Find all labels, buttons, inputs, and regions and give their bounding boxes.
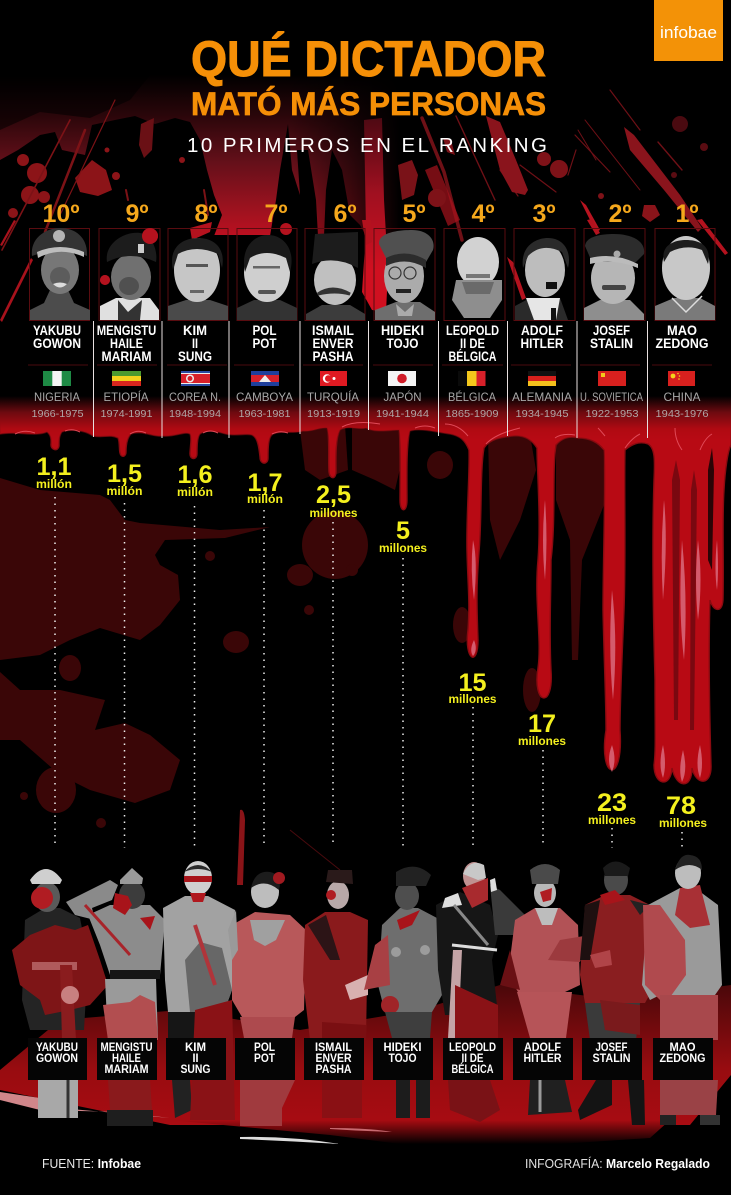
column separators: [94, 321, 648, 438]
ranking positions: 3º: [532, 200, 556, 228]
flags: [43, 371, 695, 386]
bottom name labels: [28, 1038, 713, 1080]
name list row: II DE: [460, 336, 485, 351]
bottom name labels: HIDEKI: [384, 1042, 422, 1054]
country and period labels: 1963-1981: [238, 408, 291, 420]
portrait: Hideki Tojo: [375, 230, 435, 320]
death toll values: millón: [36, 479, 72, 491]
death toll values: millones: [310, 508, 358, 520]
bottom name labels: ZEDONG: [660, 1053, 706, 1065]
country and period labels: 1974-1991: [100, 408, 153, 420]
country and period labels: 1941-1944: [376, 408, 429, 420]
name list row: KIM: [183, 323, 207, 338]
blood floor behind figures: [0, 810, 731, 1144]
portrait: Pol Pot: [237, 235, 297, 320]
portrait: Adolf Hitler: [515, 238, 569, 320]
portrait: Ismail Enver Pasha: [306, 232, 365, 320]
name list row: MENGISTU: [97, 323, 156, 338]
figure: Ismail Enver Pasha: [303, 870, 368, 1118]
flag: Japan: [388, 371, 416, 386]
portrait: Leopold II: [452, 237, 502, 318]
country and period labels: U. SOVIETICA: [580, 390, 643, 404]
bottom name labels: HITLER: [524, 1053, 562, 1065]
flag: Cambodia: [251, 371, 279, 386]
title: QUÉ DICTADOR: [191, 31, 546, 87]
death toll values: 5: [396, 517, 410, 545]
death toll values: 15: [458, 669, 487, 697]
blood band with drips: [0, 385, 731, 784]
bottom name labels: KIM: [185, 1042, 206, 1054]
name list row: ADOLF: [521, 323, 563, 338]
portrait row frames: [30, 228, 715, 320]
country and period labels: [32, 389, 709, 420]
portrait: Mengistu Haile Mariam: [100, 228, 159, 320]
name list row: HITLER: [520, 336, 564, 351]
bottom name labels: ADOLF: [524, 1042, 561, 1054]
bottom name labels: LEOPOLD: [449, 1042, 496, 1054]
name list row: ISMAIL: [312, 323, 354, 338]
death toll values: millón: [106, 486, 142, 498]
country and period labels: COREA N.: [169, 390, 221, 404]
country and period labels: 1865-1909: [446, 408, 499, 420]
death toll values: [36, 453, 707, 830]
ranking positions: 8º: [194, 200, 218, 228]
name list row: STALIN: [590, 336, 633, 351]
figure: Adolf Hitler: [500, 864, 590, 1115]
death toll values: 1,5: [107, 460, 142, 488]
name list row: POT: [252, 336, 277, 351]
country and period labels: BÉLGICA: [448, 389, 496, 404]
figure: Josef Stalin: [578, 862, 655, 1125]
death toll values: millones: [588, 815, 636, 827]
bottom name labels: II DE: [462, 1053, 484, 1065]
dotted leader lines: [55, 497, 682, 848]
death toll values: millones: [518, 736, 566, 748]
name list row: POL: [252, 323, 276, 338]
country and period labels: 1943-1976: [656, 408, 709, 420]
death toll values: 2,5: [316, 481, 351, 509]
bottom name labels: ENVER: [316, 1053, 352, 1065]
title: MATÓ MÁS PERSONAS: [191, 86, 546, 122]
name list row: TOJO: [386, 336, 418, 351]
mid-page dark blood splatter: [0, 425, 606, 828]
death toll values: millones: [659, 818, 707, 830]
bottom name labels: POL: [254, 1042, 275, 1054]
name list row: ENVER: [312, 336, 354, 351]
figure: Mengistu Haile Mariam: [66, 868, 165, 1126]
country and period labels: ALEMANIA: [512, 390, 572, 404]
bottom name labels: GOWON: [36, 1053, 78, 1065]
name list row: JOSEF: [593, 323, 630, 338]
flag: Turkey: [320, 371, 347, 386]
country and period labels: ETIOPÍA: [104, 389, 148, 404]
name list row: HIDEKI: [381, 323, 424, 338]
death toll values: 23: [597, 789, 627, 817]
ranking positions: 5º: [402, 200, 426, 228]
ranking positions: 2º: [608, 200, 632, 228]
name list row: PASHA: [312, 349, 354, 364]
name list row: MAO: [667, 323, 697, 338]
bottom name labels: BÉLGICA: [452, 1063, 494, 1076]
bottom name labels: SUNG: [180, 1064, 211, 1076]
bottom name labels: MAO: [670, 1042, 696, 1054]
death toll values: millón: [177, 487, 213, 499]
logo: infobae: infobae: [660, 24, 717, 42]
death toll values: 1,7: [248, 469, 282, 497]
country and period labels: 1966-1975: [32, 408, 84, 420]
top blood splatter background: [0, 75, 728, 322]
flag: USSR: [598, 371, 626, 386]
bottom name labels: ISMAIL: [315, 1042, 352, 1054]
ranking positions: [43, 200, 699, 228]
ranking positions: 10º: [43, 200, 79, 228]
bottom name labels: YAKUBU: [36, 1042, 78, 1054]
country and period labels: TURQUÍA: [307, 389, 359, 404]
figure: Yakubu Gowon: [12, 869, 108, 1118]
death toll values: millones: [448, 694, 496, 706]
figure: Leopold II: [436, 862, 525, 1122]
figure: Mao Zedong: [642, 855, 722, 1125]
country and period labels: CHINA: [664, 390, 700, 404]
death toll values: millón: [247, 494, 283, 506]
bottom name labels: HAILE: [112, 1053, 141, 1065]
country and period labels: NIGERIA: [34, 390, 80, 404]
figure: Hideki Tojo: [364, 867, 442, 1118]
death toll values: 78: [666, 792, 696, 820]
name list row: [33, 323, 708, 364]
ranking positions: 4º: [471, 200, 495, 228]
country and period labels: CAMBOYA: [236, 390, 293, 404]
bottom name labels: JOSEF: [596, 1042, 628, 1054]
bottom name labels: POT: [254, 1053, 275, 1065]
ranking positions: 6º: [333, 200, 357, 228]
death toll values: 17: [528, 710, 556, 738]
name list row: LEOPOLD: [446, 323, 499, 338]
portrait: Josef Stalin: [584, 234, 644, 320]
name list row: BÉLGICA: [448, 349, 497, 364]
name list row: ZEDONG: [656, 336, 708, 351]
ranking positions: 9º: [125, 200, 149, 228]
name list row: II: [192, 336, 198, 351]
flag: Belgium: [458, 371, 486, 386]
country and period labels: JAPÓN: [384, 389, 422, 404]
country and period labels: 1934-1945: [516, 408, 569, 420]
bottom name labels: II: [192, 1053, 198, 1065]
divider lines under names: [28, 364, 712, 366]
title: 10 PRIMEROS EN EL RANKING: [187, 134, 547, 157]
name list row: SUNG: [178, 349, 212, 364]
country and period labels: 1922-1953: [586, 408, 639, 420]
ranking positions: 7º: [264, 200, 288, 228]
flag: Ethiopia: [112, 371, 141, 386]
country and period labels: 1948-1994: [169, 408, 221, 420]
flag: Nigeria: [43, 371, 71, 386]
death toll values: 1,1: [36, 453, 72, 481]
bottom name labels: TOJO: [388, 1053, 417, 1065]
title: [187, 31, 547, 157]
logo: infobae: [654, 0, 723, 61]
figure: Pol Pot: [228, 872, 306, 1126]
ranking positions: 1º: [675, 200, 699, 228]
bottom name labels: PASHA: [316, 1064, 352, 1076]
name list row: GOWON: [33, 336, 81, 351]
flag: China: [668, 371, 695, 386]
death toll values: millones: [379, 543, 427, 555]
death toll values: 1,6: [178, 461, 212, 489]
name list row: YAKUBU: [33, 323, 81, 338]
bottom name labels: MENGISTU: [100, 1042, 152, 1054]
figure: Kim Il Sung: [163, 861, 235, 1120]
flag: Germany: [528, 371, 556, 386]
author credit: INFOGRAFÍA: Marcelo Regalado: [525, 1156, 710, 1171]
flag: North Korea: [181, 371, 210, 386]
source credit: FUENTE: Infobae: [42, 1156, 141, 1171]
portrait: Kim Il Sung: [168, 238, 228, 320]
name list row: HAILE: [110, 336, 143, 351]
bottom name labels: MARIAM: [104, 1064, 148, 1076]
portrait: Mao Zedong: [655, 236, 715, 320]
portrait: Yakubu Gowon: [30, 228, 90, 320]
bottom name labels: STALIN: [592, 1053, 630, 1065]
country and period labels: 1913-1919: [307, 408, 360, 420]
name list row: MARIAM: [102, 349, 152, 364]
